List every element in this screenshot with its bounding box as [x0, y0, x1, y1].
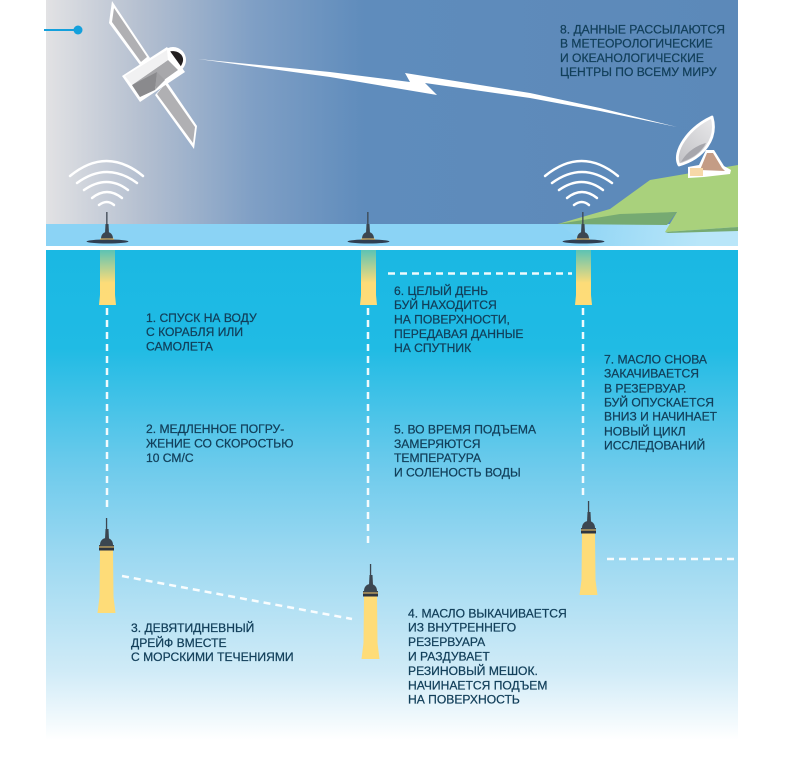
- text: step 5: ТЕМПЕРАТУРА: [394, 451, 482, 465]
- text: step 4: 4. МАСЛО ВЫКАЧИВАЕТСЯ: [408, 606, 567, 620]
- text: step 7: [604, 352, 718, 452]
- text: step 1: [146, 311, 257, 354]
- text: step 6: 6. ЦЕЛЫЙ ДЕНЬ: [394, 283, 488, 298]
- underwater buoy 1: [98, 518, 116, 613]
- text: step 3: ДРЕЙФ ВМЕСТЕ: [131, 635, 227, 650]
- text: step 4: НА ПОВЕРХНОСТЬ: [408, 692, 520, 706]
- underwater buoy 2: [362, 564, 380, 659]
- arrow: data signal from satellite to ground station: [198, 59, 677, 127]
- text: step 5: [394, 422, 537, 480]
- sky background: [46, 0, 738, 224]
- dashed paths of the buoy: [107, 274, 738, 619]
- surface line: [46, 246, 738, 250]
- text: step 2: 2. МЕДЛЕННОЕ ПОГРУ-: [146, 422, 284, 436]
- text: step 7: БУЙ ОПУСКАЕТСЯ: [604, 394, 714, 410]
- surface buoy right: [562, 212, 604, 305]
- text: step 6: ПЕРЕДАВАЯ ДАННЫЕ: [394, 327, 523, 341]
- text: step 8: 8. ДАННЫЕ РАССЫЛАЮТСЯ: [560, 22, 725, 36]
- text: step 5: И СОЛЕНОСТЬ ВОДЫ: [394, 466, 521, 480]
- text: step 8: ЦЕНТРЫ ПО ВСЕМУ МИРУ: [560, 65, 717, 79]
- text: step 7: ВНИЗ И НАЧИНАЕТ: [604, 410, 718, 424]
- surface buoy left: [86, 212, 128, 305]
- text: step 6: БУЙ НАХОДИТСЯ: [394, 297, 497, 312]
- text: step 5: 5. ВО ВРЕМЯ ПОДЪЕМА: [394, 422, 537, 436]
- text: step 4: ИЗ ВНУТРЕННЕГО: [408, 620, 516, 634]
- text: step 6: [394, 283, 523, 355]
- text: step 1: САМОЛЕТА: [146, 340, 214, 354]
- text: step 7: ЗАКАЧИВАЕТСЯ: [604, 366, 699, 380]
- text: step 5: ЗАМЕРЯЮТСЯ: [394, 437, 480, 451]
- text: step 2: ЖЕНИЕ СО СКОРОСТЬЮ: [146, 436, 293, 450]
- surface water band: [46, 224, 738, 246]
- text: step 8: [560, 22, 725, 79]
- text: step 4: [408, 606, 567, 706]
- text: step 6: НА ПОВЕРХНОСТИ,: [394, 312, 510, 326]
- text: step 1: С КОРАБЛЯ ИЛИ: [146, 325, 243, 339]
- icon: signal waves right: [545, 161, 618, 205]
- island: [558, 165, 738, 246]
- text: step 3: [131, 620, 294, 664]
- text: step 7: НОВЫЙ ЦИКЛ: [604, 424, 686, 438]
- text: step 4: РЕЗЕРВУАРА: [408, 635, 486, 649]
- text: step 3: 3. ДЕВЯТИДНЕВНЫЙ: [131, 620, 254, 635]
- text: step 8: В МЕТЕОРОЛОГИЧЕСКИЕ: [560, 36, 713, 50]
- surface buoy middle: [348, 212, 390, 305]
- text: step 7: В РЕЗЕРВУАР.: [604, 382, 686, 396]
- text: step 8: И ОКЕАНОЛОГИЧЕСКИЕ: [560, 51, 704, 65]
- text: step 1: 1. СПУСК НА ВОДУ: [146, 311, 257, 325]
- text: step 4: НАЧИНАЕТСЯ ПОДЪЕМ: [408, 678, 547, 692]
- text: step 6: НА СПУТНИК: [394, 341, 471, 355]
- text: step 4: РЕЗИНОВЫЙ МЕШОК.: [408, 663, 538, 678]
- ocean background: [46, 250, 738, 740]
- text: step 2: [146, 422, 293, 465]
- pointer line with dot: [44, 26, 82, 34]
- icon: signal waves left: [70, 161, 143, 205]
- icon: ground station dish: [677, 117, 731, 178]
- text: step 7: 7. МАСЛО СНОВА: [604, 352, 708, 366]
- text: step 4: И РАЗДУВАЕТ: [408, 650, 490, 664]
- text: step 7: ИССЛЕДОВАНИЙ: [604, 438, 705, 452]
- icon: satellite: [109, 1, 197, 149]
- text: step 3: С МОРСКИМИ ТЕЧЕНИЯМИ: [131, 650, 294, 664]
- underwater buoy 3: [580, 501, 598, 595]
- text: step 2: 10 СМ/С: [146, 451, 194, 465]
